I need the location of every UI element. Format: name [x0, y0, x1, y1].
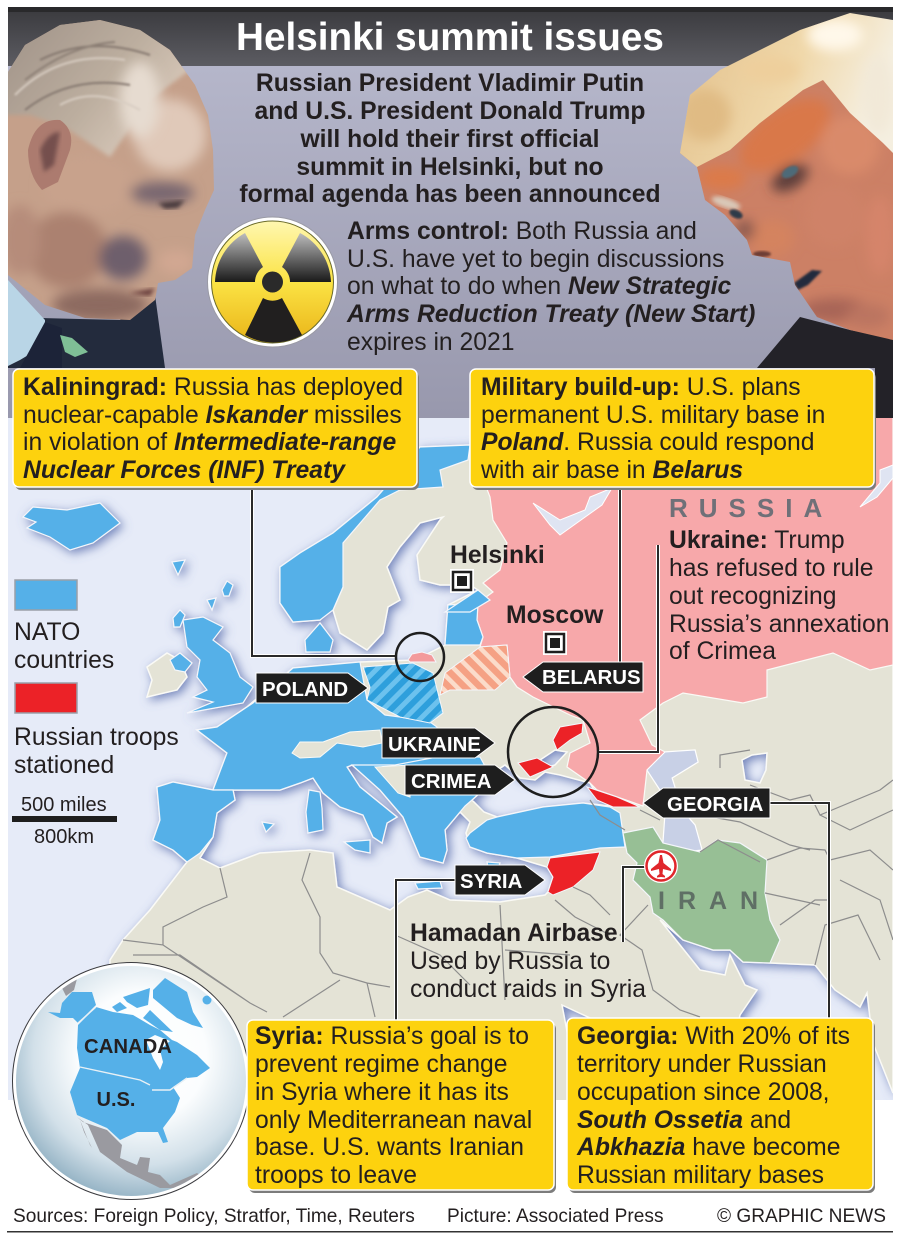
photo: Vladimir Putin: [0, 15, 214, 368]
label: Crimea: CRIMEA: [411, 771, 492, 793]
legend: Russian troops: [14, 724, 179, 751]
label: Poland: POLAND: [262, 679, 348, 701]
Alaska: [48, 992, 96, 1023]
left eyebrow: [710, 194, 742, 212]
label: Georgia: [643, 788, 770, 818]
icon: radiation symbol: [208, 217, 338, 347]
callout: Georgia: South Ossetia and: [577, 1107, 791, 1134]
text: Hamadan Airbase: [410, 920, 646, 1003]
Kaliningrad: [408, 652, 436, 662]
inset globe: North America: [12, 962, 250, 1200]
callout: Syria: in Syria where it has its: [255, 1079, 509, 1106]
scale bar: [12, 794, 117, 848]
callout: Georgia: Abkhazia have become: [576, 1134, 840, 1161]
label: Crimea: [405, 765, 515, 795]
city: Moscow: Moscow: [506, 602, 604, 629]
callout: Syria: prevent regime change: [255, 1051, 508, 1078]
text: Ukraine: out recognizing: [669, 583, 836, 610]
legend swatch: Russian troops: [15, 683, 77, 713]
label: Georgia: GEORGIA: [667, 794, 764, 816]
Greenland: [153, 978, 203, 1028]
panel: header photo area: [8, 7, 893, 418]
text: Hamadan Airbase: conduct raids in Syria: [410, 976, 646, 1003]
nostril: [753, 251, 771, 257]
NATO Europe: [153, 445, 625, 863]
callout: Georgia: Georgia: With 20% of its: [577, 1023, 850, 1050]
label: Syria: [455, 865, 545, 895]
leader lines: [252, 487, 829, 1020]
title bar: [8, 7, 893, 66]
Russia: [470, 410, 893, 806]
scale bar: 500 miles: [21, 794, 107, 816]
text: Hamadan Airbase: Hamadan Airbase: [410, 920, 618, 947]
Russian troops: Crimea: [518, 758, 553, 777]
Mexico and Central America: [77, 1117, 207, 1188]
mouth: [794, 270, 822, 290]
inset globe: North America: U.S.: [97, 1089, 135, 1111]
callout: Military build-up: with air base in Belarus: [480, 457, 743, 484]
text: Ukraine: has refused to rule: [669, 555, 873, 582]
callout: Syria: Syria: Russia’s goal is to: [255, 1023, 529, 1050]
jacket: [757, 317, 893, 418]
Bosnia and Serbia: [375, 765, 410, 797]
label: Russia: RUSSIA: [669, 493, 833, 523]
United States and Canada: [70, 1007, 210, 1143]
text: Ukraine: of Crimea: [669, 638, 776, 665]
callout: Kaliningrad: in violation of Intermediate-range: [23, 429, 396, 456]
legend: countries: [14, 647, 114, 674]
Ireland: [147, 653, 187, 697]
suit: [8, 295, 165, 368]
intro text: [239, 70, 661, 208]
head: [8, 20, 214, 320]
ear: [28, 120, 71, 190]
title: Helsinki summit issues: [236, 16, 664, 59]
label: Belarus: [523, 662, 643, 692]
Arctic islands: [112, 988, 173, 1032]
callout: Syria: [247, 1020, 556, 1193]
icon: airbase marker: [644, 849, 678, 883]
border lines: [123, 750, 893, 1017]
city: Moscow: [506, 602, 604, 655]
Russian troops: Georgia: [587, 787, 640, 807]
scale bar: 800km: [34, 826, 94, 848]
footer credits: Picture: Associated Press: [447, 1206, 664, 1227]
eye and mouth: [158, 200, 185, 209]
label: Syria: SYRIA: [460, 871, 523, 893]
label: Ukraine: [382, 728, 495, 758]
Iran: [623, 827, 780, 963]
callout: Military build-up: permanent U.S. military base in: [481, 402, 825, 429]
shirt: [8, 280, 45, 366]
text: arms control: Arms control: Both Russia and: [347, 218, 697, 245]
city: Helsinki: [450, 542, 545, 593]
hair: [8, 20, 187, 158]
Iceland: [202, 996, 212, 1004]
eyes: [780, 164, 799, 180]
text: arms control: expires in 2021: [347, 329, 514, 356]
Siberia tip: [62, 980, 77, 996]
face: [680, 70, 893, 340]
intro text: summit in Helsinki, but no: [296, 154, 604, 181]
callout: Military build-up: Military build-up: U.S. plans: [481, 374, 801, 401]
text: Ukraine: [669, 527, 890, 665]
Poland hatched: [363, 663, 443, 723]
Kaliningrad circle: [396, 633, 444, 681]
tie: [26, 322, 56, 356]
seas in Russia: [533, 488, 612, 535]
legend: stationed: [14, 752, 114, 779]
callout: Military build-up: [470, 369, 876, 490]
label: Iran: IRAN: [658, 887, 771, 915]
text: Ukraine: Ukraine: Trump: [669, 527, 845, 554]
label: Ukraine: UKRAINE: [388, 734, 481, 756]
text: arms control: Arms Reduction Treaty (New Start): [346, 301, 755, 328]
text: arms control: U.S. have yet to begin discussions: [347, 246, 724, 273]
callout: Georgia: Russian military bases: [577, 1162, 824, 1189]
callout: Georgia: territory under Russian: [577, 1051, 827, 1078]
callout: Kaliningrad: [13, 369, 419, 490]
panel: map of Europe and Middle East: [8, 418, 893, 1100]
Hudson Bay: [146, 1035, 170, 1070]
callout: Syria: troops to leave: [255, 1162, 417, 1189]
callout: Military build-up: Poland. Russia could respond: [481, 429, 814, 456]
legend: [14, 580, 179, 779]
intro text: formal agenda has been announced: [239, 181, 661, 208]
Russian troops: Syria: [547, 852, 600, 895]
footer credits: © GRAPHIC NEWS: [717, 1206, 886, 1227]
text: Hamadan Airbase: Used by Russia to: [410, 948, 610, 975]
callout: Kaliningrad: Nuclear Forces (INF) Treaty: [23, 457, 346, 484]
globe labels: CANADA: [84, 1036, 172, 1058]
text: arms control: on what to do when New Strategic: [347, 273, 732, 300]
legend: NATO: [14, 619, 80, 646]
text: Ukraine: Russia’s annexation: [669, 611, 890, 638]
intro text: Russian President Vladimir Putin: [256, 70, 644, 97]
intro text: will hold their first official: [299, 126, 600, 153]
footer credits: Sources: Foreign Policy, Stratfor, Time, Reuters: [13, 1206, 415, 1227]
callout: Syria: base. U.S. wants Iranian: [255, 1134, 524, 1161]
Russian troops: eastern Ukraine: [553, 723, 583, 750]
label: Poland: [256, 673, 368, 703]
land masses: [22, 440, 893, 1100]
photo: Donald Trump: [679, 13, 894, 418]
hair: [680, 13, 893, 167]
city: Helsinki: Helsinki: [450, 542, 545, 569]
label: Belarus: BELARUS: [542, 667, 641, 689]
callout: Kaliningrad: Kaliningrad: Russia has deployed: [23, 374, 403, 401]
callout: Kaliningrad: nuclear-capable Iskander missiles: [23, 402, 402, 429]
Iceland, UK, Denmark, islands: [23, 503, 500, 889]
callout: Georgia: [567, 1018, 875, 1193]
callout: Syria: only Mediterranean naval: [255, 1107, 532, 1134]
callout: Georgia: occupation since 2008,: [577, 1079, 830, 1106]
intro text: and U.S. President Donald Trump: [255, 98, 645, 125]
Crimea circle: [508, 707, 598, 797]
footer credits: [7, 1206, 893, 1232]
Switzerland and Austria: [292, 730, 382, 758]
Belarus hatched: [440, 645, 510, 695]
text: arms control: [346, 218, 755, 356]
legend swatch: NATO: [15, 580, 77, 610]
